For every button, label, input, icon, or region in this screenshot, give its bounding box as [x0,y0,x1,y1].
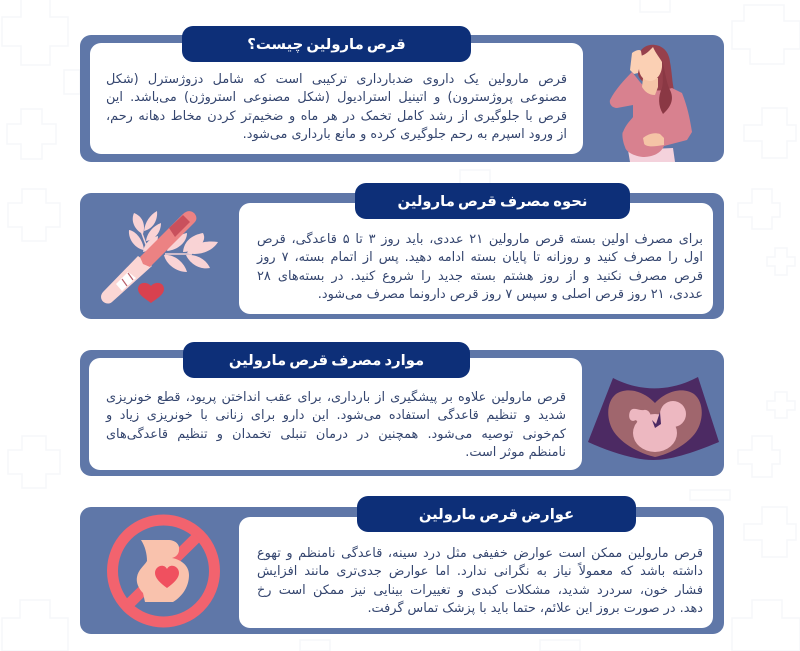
text block: side effects [257,546,703,616]
text block: uses: کم‌خونی توصیه می‌شود. همچنین در درمان تنبلی تخمدان و تنظیم قاعدگی‌های [106,427,566,442]
text block: what is Marvelon: از ورود اسپرم به رحم جلوگیری کرده و مانع بارداری می‌شود. [243,127,567,142]
panel 3 text card [89,358,582,470]
panel: side effects [80,507,724,634]
heading: side effects [357,496,636,532]
text block: what is Marvelon: مصنوعی پروژسترون) و اتینیل استرادیول (شکل مصنوعی استروژن) می‌باشد. این [106,90,567,105]
panel: uses [80,350,724,476]
text block: what is Marvelon: قرص مارولین یک داروی ضدبارداری ترکیبی است که شامل دزوژسترل (شکل [106,72,567,87]
icon: pregnant woman holding head [610,44,692,162]
text block: how to use: عددی، ۲۱ روز قرص اصلی و سپس ۷ روز قرص دارونما مصرف می‌شود. [318,287,703,302]
heading: uses [183,342,470,378]
text block: how to use: قرص مصرف نکنید و از روز هشتم بسته جدید را شروع کنید. در بسته‌های ۲۸ [257,269,703,284]
panel: what is Marvelon [80,35,724,162]
icon: pregnancy test with leaves and heart [101,211,218,304]
text block: how to use [256,232,703,302]
panel 2 text card [239,203,713,314]
text block: side effects: قرص مارولین ممکن است عوارض خفیفی مثل درد سینه، قاعدگی نامنظم و تهوع [257,546,703,561]
panel 4 text card [239,517,713,628]
text block: uses: نامنظم موثر است. [465,445,566,460]
heading: side effects: عوارض قرص مارولین [419,506,574,523]
panel 1 text card [90,43,583,154]
text block: uses [105,390,566,460]
heading: how to use [355,183,630,219]
text block: side effects: داشته باشد که معمولاً نیاز به نگرانی ندارد. اما عوارض جدی‌تری مانند افزایش [257,564,703,579]
panel: how to use [80,193,724,319]
text block: what is Marvelon: قرص با جلوگیری از رشد کامل تخمک در هر ماه و ضخیم‌تر کردن مخاط دهانه رحم، [106,109,567,124]
text block: uses: قرص مارولین علاوه بر پیشگیری از بارداری، برای عقب انداختن پریود، قطع خونریزی [106,390,566,405]
heading: how to use: نحوه مصرف قرص مارولین [398,193,587,210]
heading: uses: موارد مصرف قرص مارولین [229,352,424,369]
heading: what is Marvelon [182,26,471,62]
icon: no pregnancy prohibition sign [107,514,220,628]
text block: uses: شدید و تنظیم قاعدگی استفاده می‌شود. این دارو برای زنانی با خونریزی زیاد و [106,408,566,423]
text block: how to use: برای مصرف اولین بسته قرص مارولین ۲۱ عددی، باید روز ۳ تا ۵ قاعدگی، قرص [257,232,703,247]
text block: what is Marvelon [106,72,567,142]
icon: ultrasound image of fetus [588,377,719,460]
heading: what is Marvelon: قرص مارولین چیست؟ [247,36,406,53]
text block: how to use: اول را مصرف کنید و روزانه تا پایان بسته ادامه دهید. پس از اتمام بسته، ۷ روز [257,250,703,265]
text block: side effects: دهد. در صورت بروز این علائم، حتما باید با پزشک تماس گرفت. [367,601,703,616]
text block: side effects: فشار خون، سردرد شدید، مشکلات کبدی و تغییرات بینایی نیز ممکن است رخ [257,583,703,598]
